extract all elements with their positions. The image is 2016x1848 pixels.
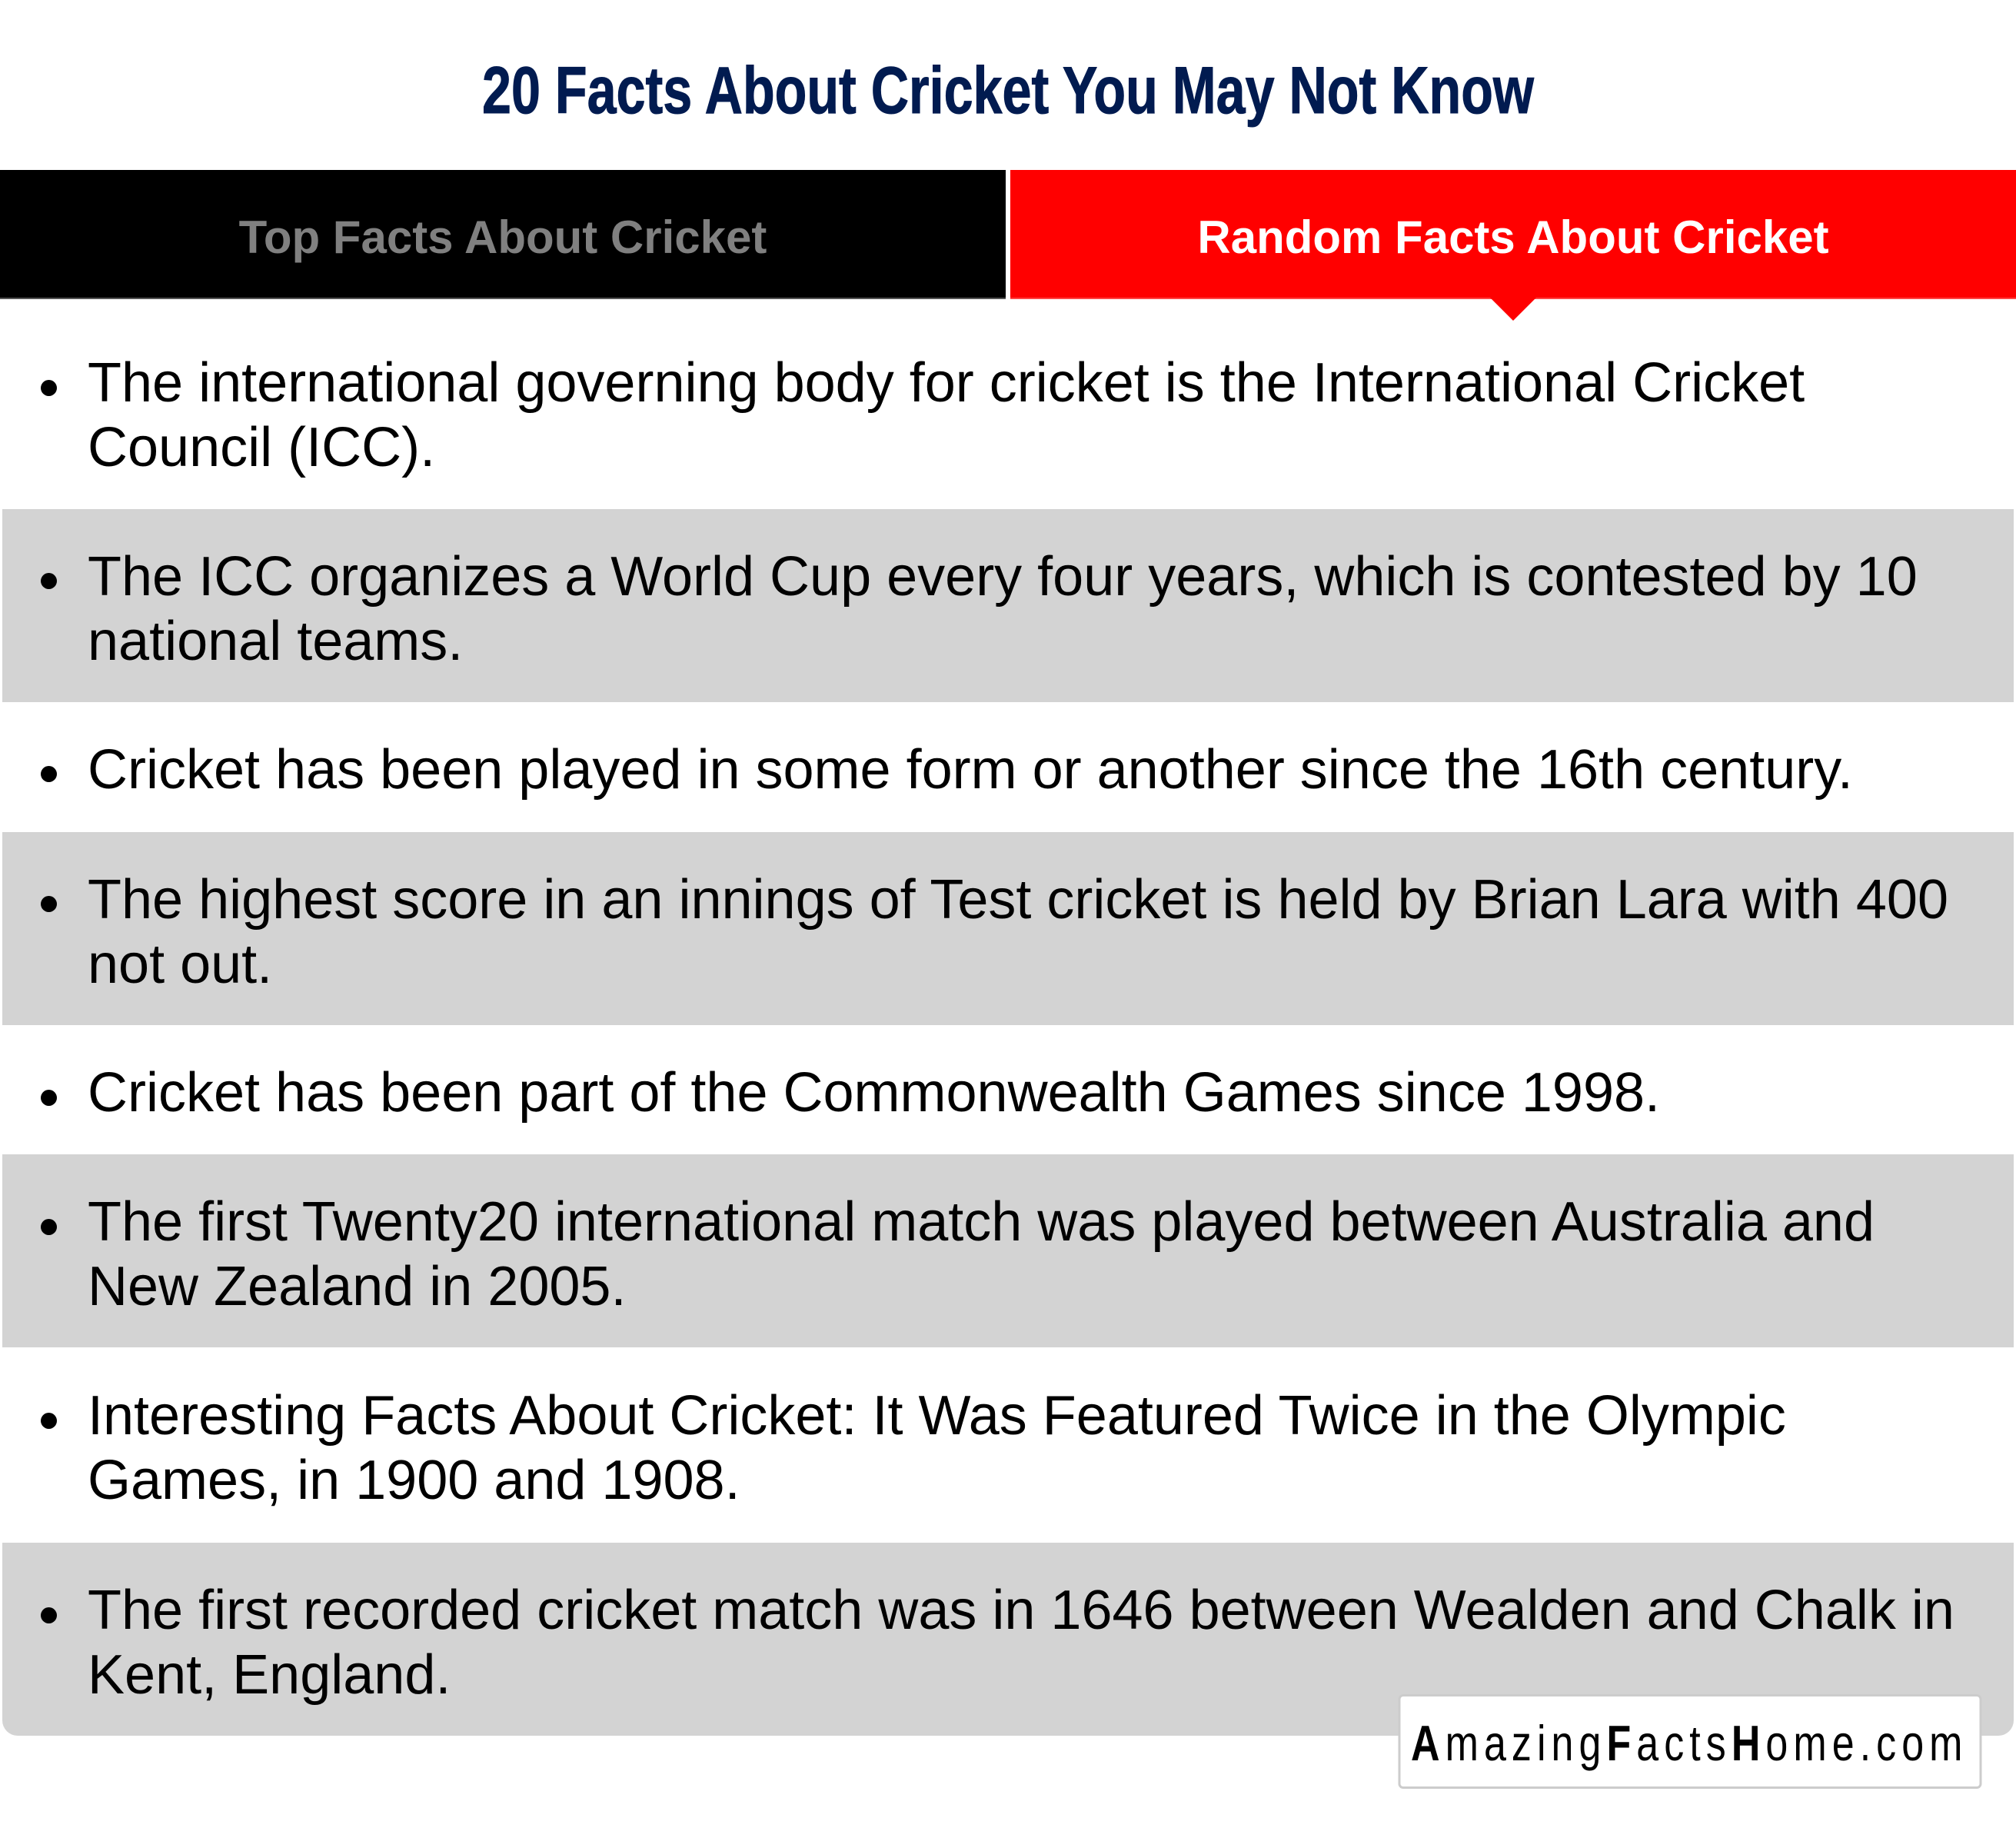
fact 7: Interesting Facts About Cricket: It Was Featured Twice in the Olympic <box>88 1385 1786 1447</box>
fact 1 <box>41 352 1805 478</box>
tab: random facts (active) <box>1010 170 2016 299</box>
fact 7: Games, in 1900 and 1908. <box>88 1450 740 1511</box>
fact 4: The highest score in an innings of Test cricket is held by Brian Lara with 400 <box>88 869 1948 931</box>
fact 8 <box>2 1543 2014 1736</box>
watermark badge: AmazingFactsHome.com <box>1411 1716 1968 1771</box>
tab: top facts (inactive): Top Facts About Cricket <box>239 211 767 263</box>
tab: random facts (active): Random Facts About Cricket <box>1197 211 1829 263</box>
fact 1: The international governing body for cricket is the International Cricket <box>88 352 1805 414</box>
fact 5: Cricket has been part of the Commonwealth Games since 1998. <box>88 1062 1660 1124</box>
fact 2: national teams. <box>88 611 463 672</box>
watermark badge <box>1398 1696 1982 1789</box>
fact 2 <box>2 509 2014 702</box>
fact 8: The first recorded cricket match was in 1646 between Wealden and Chalk in <box>88 1580 1954 1641</box>
fact 7 <box>41 1385 1786 1511</box>
fact 8: Kent, England. <box>88 1644 451 1706</box>
title: 20 Facts About Cricket You May Not Know <box>482 54 1535 128</box>
fact 6: The first Twenty20 international match was played between Australia and <box>88 1191 1875 1253</box>
fact 3: Cricket has been played in some form or another since the 16th century. <box>88 739 1853 801</box>
active tab pointer <box>1490 298 1536 321</box>
fact 1: Council (ICC). <box>88 417 435 478</box>
fact 4: not out. <box>88 934 272 995</box>
fact 4 <box>2 832 2014 1025</box>
tab: top facts (inactive) <box>0 170 1006 299</box>
fact 2: The ICC organizes a World Cup every four years, which is contested by 10 <box>88 546 1918 608</box>
fact 6: New Zealand in 2005. <box>88 1256 626 1317</box>
fact 6 <box>2 1154 2014 1347</box>
